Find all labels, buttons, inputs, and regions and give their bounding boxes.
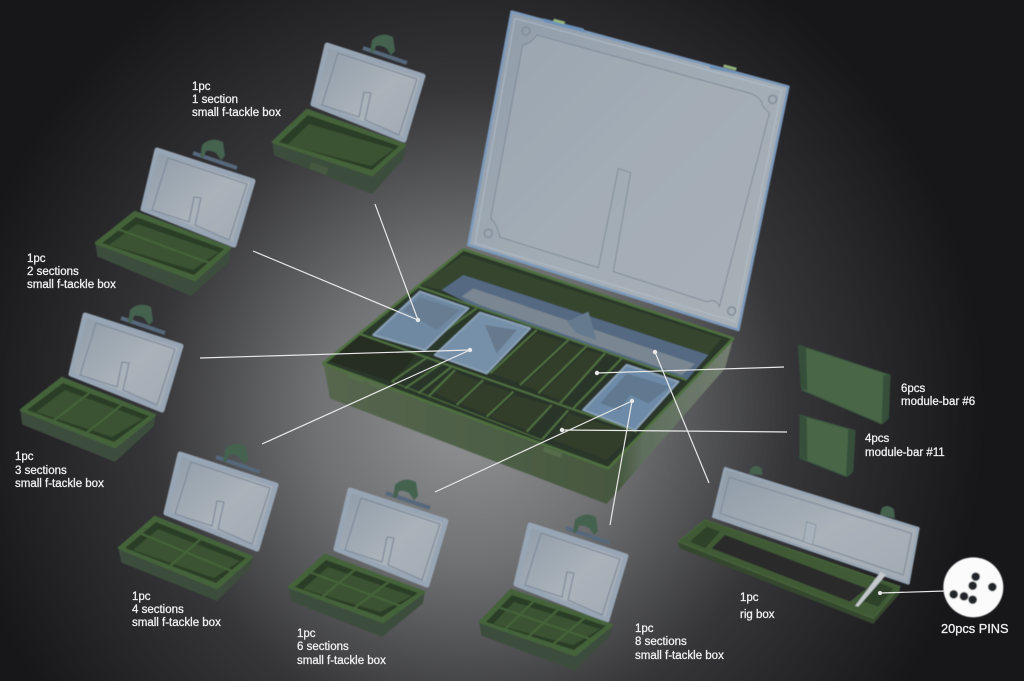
- label: 1 section box: 1 section: [192, 94, 238, 106]
- label: module-bar 11: 4pcs: [865, 433, 890, 445]
- rig box: [678, 466, 918, 624]
- small box 4 sections: [119, 444, 276, 600]
- rig tray: [678, 542, 900, 624]
- rig lid: [713, 468, 918, 583]
- compartments: [330, 335, 420, 382]
- pins circle: [943, 557, 1003, 617]
- label: 8 sections box: 1pc: [635, 623, 654, 635]
- main box open lid: [468, 12, 788, 330]
- compartment floors: [430, 333, 633, 460]
- label: 2 sections box: 2 sections: [27, 266, 79, 278]
- label: module-bar 6: module-bar #6: [901, 396, 975, 408]
- blue inner box C: [583, 365, 678, 430]
- rig handles: [749, 466, 895, 518]
- rig pin tool: [855, 572, 886, 607]
- latches: [348, 374, 562, 458]
- small box 1 section: [273, 35, 423, 193]
- label: module-bar 11: module-bar #11: [865, 447, 945, 459]
- label: 3 sections box: 3 sections: [15, 465, 67, 477]
- label: rig box: 1pc: [740, 592, 759, 604]
- small box 3 sections: [21, 305, 181, 461]
- rim: [323, 249, 733, 468]
- label: 2 sections box: 1pc: [27, 253, 46, 265]
- main box base and compartments: [323, 249, 733, 504]
- label: module-bar 6: 6pcs: [901, 383, 926, 395]
- back wall: [420, 255, 722, 355]
- blue inner box A: [373, 292, 468, 350]
- label: 3 sections box: 1pc: [15, 451, 34, 463]
- label: 4 sections box: 1pc: [132, 591, 151, 603]
- label: pins: 20pcs PINS: [941, 621, 1009, 636]
- module-bar 11: [800, 415, 855, 477]
- long blue tray: [442, 275, 708, 380]
- label: 1 section box: 1pc: [192, 81, 211, 93]
- label: 8 sections box: small f-tackle box: [635, 650, 724, 662]
- label: 2 sections box: small f-tackle box: [27, 279, 116, 291]
- label: 6 sections box: 6 sections: [297, 641, 349, 653]
- leader lines: [200, 204, 945, 595]
- label: 1 section box: small f-tackle box: [192, 107, 281, 119]
- label: 4 sections box: small f-tackle box: [132, 617, 221, 629]
- label: 6 sections box: small f-tackle box: [297, 655, 386, 667]
- outer body: [323, 338, 733, 504]
- label: 8 sections box: 8 sections: [635, 636, 687, 648]
- blue inner box B: [435, 313, 530, 373]
- label: 3 sections box: small f-tackle box: [15, 478, 104, 490]
- label: 6 sections box: 1pc: [297, 628, 316, 640]
- dividers: [360, 287, 687, 440]
- label: rig box: rig box: [740, 609, 775, 621]
- small box 8 sections: [480, 515, 626, 670]
- small box 6 sections: [289, 480, 446, 636]
- module-bar 6: [798, 345, 890, 424]
- label: 4 sections box: 4 sections: [132, 604, 184, 616]
- small box 2 sections: [96, 140, 253, 295]
